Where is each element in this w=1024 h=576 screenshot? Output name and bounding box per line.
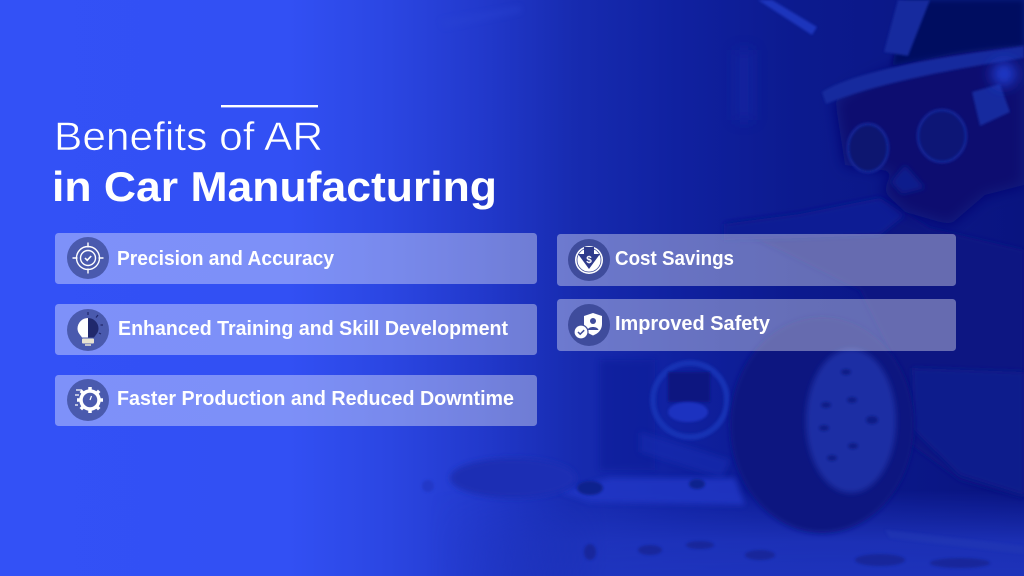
icon: coin with down arrow: $: [586, 255, 592, 266]
card: Faster Production and Reduced Downtime: Faster Production and Reduced Downtime: [117, 388, 514, 410]
icon: speed gear: [75, 387, 103, 413]
card: Precision and Accuracy: [55, 233, 537, 284]
decorative accent line above title: [221, 105, 318, 107]
card: Cost Savings: Cost Savings: [615, 248, 734, 270]
card: Improved Safety: [557, 299, 956, 351]
card: Enhanced Training and Skill Development: [55, 304, 537, 355]
card: Cost Savings: [557, 234, 956, 286]
photo: car wheel: [730, 317, 914, 533]
title line 1: Benefits of AR: [54, 115, 323, 159]
photo: worker body and jacket: [724, 198, 1024, 498]
icon: light bulb with brain: [78, 312, 103, 345]
background: blue gradient with duotone photo of AR technician and car: [327, 0, 1024, 576]
photo: car engine bay: [600, 360, 730, 478]
photo: floor glow: [559, 499, 1024, 576]
card: Enhanced Training and Skill Development: Enhanced Training and Skill Development: [118, 318, 508, 340]
icon: coin with down arrow: [575, 246, 603, 274]
card: Precision and Accuracy: Precision and Accuracy: [117, 248, 335, 270]
panel: right benefits column: [557, 234, 956, 351]
card: Faster Production and Reduced Downtime: [55, 375, 537, 426]
photo: workshop background: [759, 0, 818, 36]
card: Improved Safety: Improved Safety: [615, 313, 771, 335]
icon: target with check: [72, 242, 104, 274]
title line 2: in Car Manufacturing: [52, 163, 497, 210]
icon: shield with person and check: [574, 313, 602, 339]
panel: left benefits column: [55, 233, 537, 426]
photo: floor with debris: [422, 458, 1024, 568]
photo: head, AR headset and goggles: [822, 0, 1024, 225]
